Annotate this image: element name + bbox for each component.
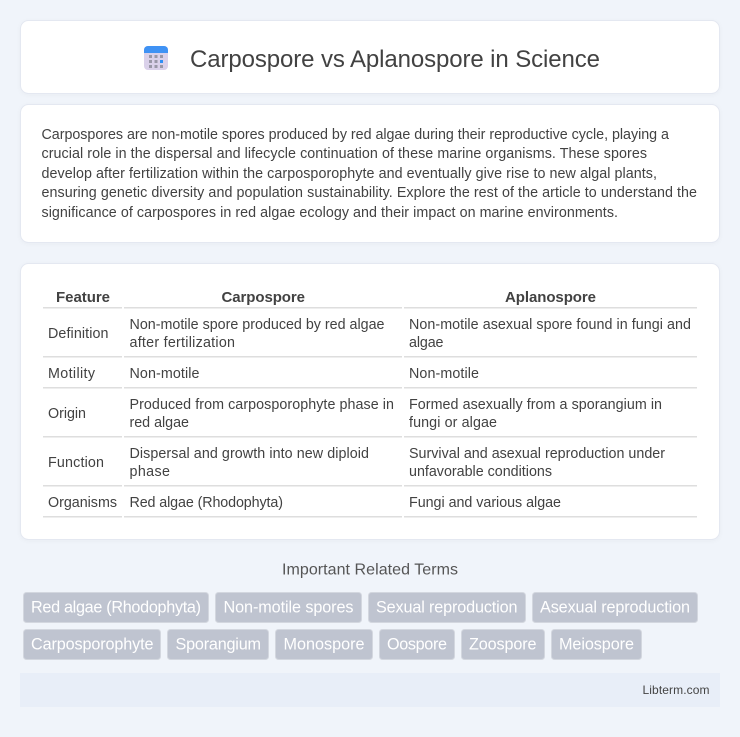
tag: Oospore xyxy=(387,636,447,654)
tag xyxy=(462,630,544,660)
row: motility: Motility xyxy=(48,366,96,382)
tag xyxy=(168,630,268,660)
intro paragraph: Carpospores are non-motile spores produced by red algae during their reproductive cycle, playing a xyxy=(42,127,669,143)
row: origin: red algae xyxy=(130,415,189,431)
row: definition: Definition xyxy=(48,326,109,342)
panel: introduction xyxy=(20,104,720,242)
row: function xyxy=(43,446,697,486)
table header row: Feature xyxy=(56,289,110,306)
row: organisms: Organisms xyxy=(48,495,117,511)
intro paragraph: ensuring genetic diversity and population sustainability. Explore the rest of the article to understand the xyxy=(42,185,697,201)
row: organisms: Fungi and various algae xyxy=(409,495,561,511)
row: origin: fungi or algae xyxy=(409,415,497,431)
tag xyxy=(216,592,362,622)
row: definition: Non-motile spore produced by red algae xyxy=(130,317,385,333)
row: origin: Produced from carposporophyte phase in xyxy=(130,397,394,413)
tag xyxy=(552,630,642,660)
tag: Sporangium xyxy=(176,636,261,654)
tag: Carposporophyte xyxy=(31,636,154,654)
tag xyxy=(24,592,208,622)
intro paragraph: develop after fertilization within the carposporophyte and eventually give rise to new algal plants, xyxy=(42,166,657,182)
row: definition xyxy=(43,317,697,358)
tag xyxy=(532,592,698,622)
row: function: unfavorable conditions xyxy=(409,464,552,480)
icon: calendar xyxy=(144,46,168,70)
tag xyxy=(368,592,526,622)
panel: comparison table xyxy=(20,264,720,540)
tag: Meiospore xyxy=(559,636,634,654)
row: function: Survival and asexual reproduction under xyxy=(409,446,665,462)
tag: Sexual reproduction xyxy=(376,598,518,616)
tag: Asexual reproduction xyxy=(540,598,690,616)
row: function: Function xyxy=(48,455,104,471)
tag: Non-motile spores xyxy=(224,598,354,616)
intro paragraph: crucial role in the dispersal and lifecycle continuation of these marine organisms. These spores xyxy=(42,146,647,162)
row: definition: after fertilization xyxy=(130,335,235,351)
table header row: Carpospore xyxy=(222,289,305,306)
table header row: Aplanospore xyxy=(505,289,596,306)
row: organisms xyxy=(43,495,697,518)
heading: related terms: Important Related Terms xyxy=(282,562,458,578)
row: origin xyxy=(43,397,697,438)
title: Carpospore vs Aplanospore in Science xyxy=(190,46,600,73)
tag: Red algae (Rhodophyta) xyxy=(31,598,201,616)
row: function: Dispersal and growth into new diploid xyxy=(130,446,369,462)
row: motility xyxy=(43,366,697,388)
tag xyxy=(276,630,372,660)
row: organisms: Red algae (Rhodophyta) xyxy=(130,495,283,511)
row: function: phase xyxy=(130,464,170,480)
tag xyxy=(380,630,454,660)
intro paragraph: significance of carpospores in red algae ecology and their impact on marine environments. xyxy=(42,205,618,221)
footer credit: Libterm.com xyxy=(642,683,710,697)
row: origin: Origin xyxy=(48,406,86,422)
row: definition: algae xyxy=(409,335,444,351)
table header row xyxy=(43,289,697,308)
row: definition: Non-motile asexual spore found in fungi and xyxy=(409,317,691,333)
intro paragraph xyxy=(42,127,697,221)
tag: Monospore xyxy=(284,636,364,654)
tag: Zoospore xyxy=(469,636,536,654)
tags: related terms xyxy=(24,592,698,660)
row: motility: Non-motile xyxy=(130,366,200,382)
panel: title header xyxy=(20,20,720,94)
row: motility: Non-motile xyxy=(409,366,479,382)
tag xyxy=(24,630,160,660)
row: origin: Formed asexually from a sporangium in xyxy=(409,397,662,413)
footer xyxy=(20,673,720,707)
